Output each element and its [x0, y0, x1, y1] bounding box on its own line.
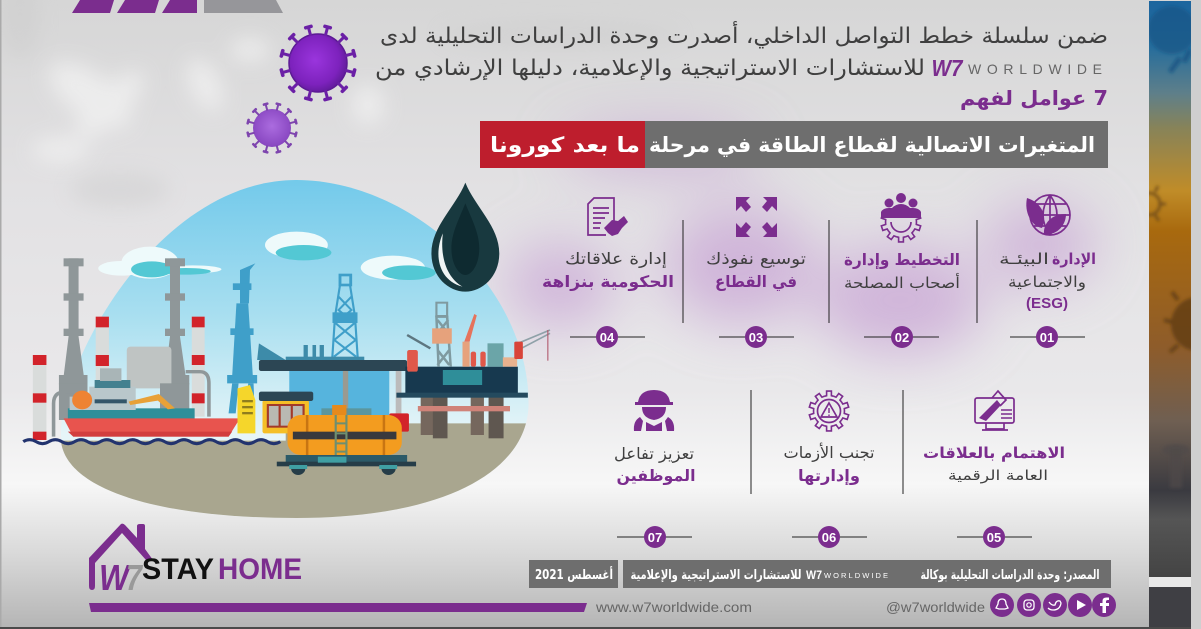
illustration: oil and gas industry scene	[22, 180, 550, 518]
source bar: للاستشارات الاستراتيجية والإعلامية	[630, 568, 802, 583]
social handle: @w7worldwide	[886, 599, 985, 615]
label: (ESG)	[1026, 295, 1068, 312]
label: الاهتمام بالعلاقات	[923, 444, 1065, 462]
icon: gear with warning sign	[809, 391, 849, 431]
column dividers	[683, 220, 977, 494]
icon: globe and leaves	[1026, 195, 1070, 235]
number badge: 01	[1040, 330, 1054, 345]
label: التخطيط وإدارة	[844, 250, 960, 269]
step 03	[706, 197, 806, 348]
pipes around ship	[54, 372, 209, 437]
right decorative image strip	[1149, 1, 1201, 629]
number badge: 06	[822, 530, 836, 545]
number badge: 02	[895, 330, 909, 345]
number badge	[570, 326, 645, 348]
label: في القطاع	[715, 272, 797, 292]
step 01	[999, 195, 1096, 348]
label: وإدارتها	[798, 466, 860, 485]
icon: people in a gear	[881, 193, 921, 242]
number badge: 04	[600, 330, 615, 345]
label: العامة الرقمية	[948, 468, 1048, 484]
label: البيئـة	[999, 250, 1049, 268]
label: الإدارة	[1052, 250, 1096, 268]
label: تجنب الأزمات	[784, 442, 874, 463]
blue flare tower	[227, 263, 257, 413]
label: إدارة علاقاتك	[565, 249, 667, 269]
logo: W7 stay home	[89, 524, 302, 598]
title banner	[480, 121, 1108, 168]
number badge: 03	[749, 330, 763, 345]
social icons	[990, 593, 1116, 617]
top tab shapes	[72, 0, 283, 13]
number badge	[1010, 326, 1085, 348]
source bar: المصدر: وحدة الدراسات التحليلية بوكالة	[920, 568, 1100, 583]
title banner: المتغيرات الاتصالية لقطاع الطاقة في مرحلة	[649, 133, 1095, 157]
date box	[529, 560, 618, 588]
label	[614, 444, 696, 485]
icon: small purple virus	[246, 102, 298, 154]
label: والاجتماعية	[1008, 273, 1086, 291]
label	[542, 249, 674, 291]
footer purple bar	[89, 603, 587, 612]
logo: W7 stay home: HOME	[218, 553, 302, 586]
cargo ship	[64, 368, 240, 437]
number badge	[957, 526, 1032, 548]
water waves	[23, 440, 280, 444]
icon: large purple virus	[279, 24, 357, 102]
label	[923, 444, 1065, 484]
icon: monitor and megaphone	[975, 391, 1014, 430]
step 04	[542, 198, 674, 348]
icon: contract and handshake	[588, 198, 628, 236]
source bar	[623, 560, 1111, 588]
label	[999, 250, 1096, 312]
label: الحكومية بنزاهة	[542, 272, 674, 291]
source bar: WORLDWIDE	[824, 571, 888, 580]
red and white chimneys	[33, 317, 205, 440]
label	[784, 442, 874, 485]
label: أصحاب المصلحة	[844, 273, 960, 292]
date box: أغسطس 2021	[535, 566, 613, 583]
blue plant building	[257, 343, 407, 424]
label	[844, 250, 960, 292]
blue lattice tower	[332, 275, 358, 360]
logo: W7 stay home: STAY	[142, 553, 214, 586]
logo: W7 stay home: W	[99, 557, 132, 598]
intro text block	[375, 21, 1108, 110]
step 05	[923, 391, 1065, 548]
title banner: ما بعد كورونا	[490, 133, 640, 157]
offshore platform	[396, 303, 550, 438]
intro text block: W7	[932, 55, 964, 81]
clouds	[98, 232, 436, 280]
website url: www.w7worldwide.com	[595, 599, 752, 615]
step 02	[844, 193, 960, 348]
logo: W7 stay home: 7	[126, 557, 144, 598]
step 07	[614, 390, 696, 548]
label: تعزيز تفاعل	[614, 444, 694, 464]
sky and ground shape	[61, 180, 528, 518]
number badge	[719, 326, 794, 348]
intro text block: WORLDWIDE	[968, 61, 1102, 77]
grey towers	[59, 258, 189, 420]
label: الموظفين	[616, 466, 696, 485]
rail tank car	[277, 405, 416, 475]
icon: expand arrows	[736, 197, 777, 237]
icon: worker with helmet	[634, 390, 674, 431]
intro text block: ضمن سلسلة خطط التواصل الداخلي، أصدرت وحدة الدراسات التحليلية لدى	[380, 21, 1108, 49]
yellow structure	[237, 385, 409, 433]
number badge: 05	[987, 530, 1001, 545]
number badge	[617, 526, 692, 548]
source bar: W7	[806, 568, 822, 582]
number badge	[864, 326, 939, 348]
intro text block: للاستشارات الاستراتيجية والإعلامية، دليلها الإرشادي من	[375, 56, 925, 81]
icon: oil drop	[431, 183, 499, 292]
intro text block: 7 عوامل لفهم	[960, 86, 1108, 110]
number badge: 07	[648, 530, 662, 545]
step 06	[784, 391, 874, 548]
label	[706, 249, 806, 292]
label: توسيع نفوذك	[706, 249, 806, 269]
number badge	[792, 526, 867, 548]
